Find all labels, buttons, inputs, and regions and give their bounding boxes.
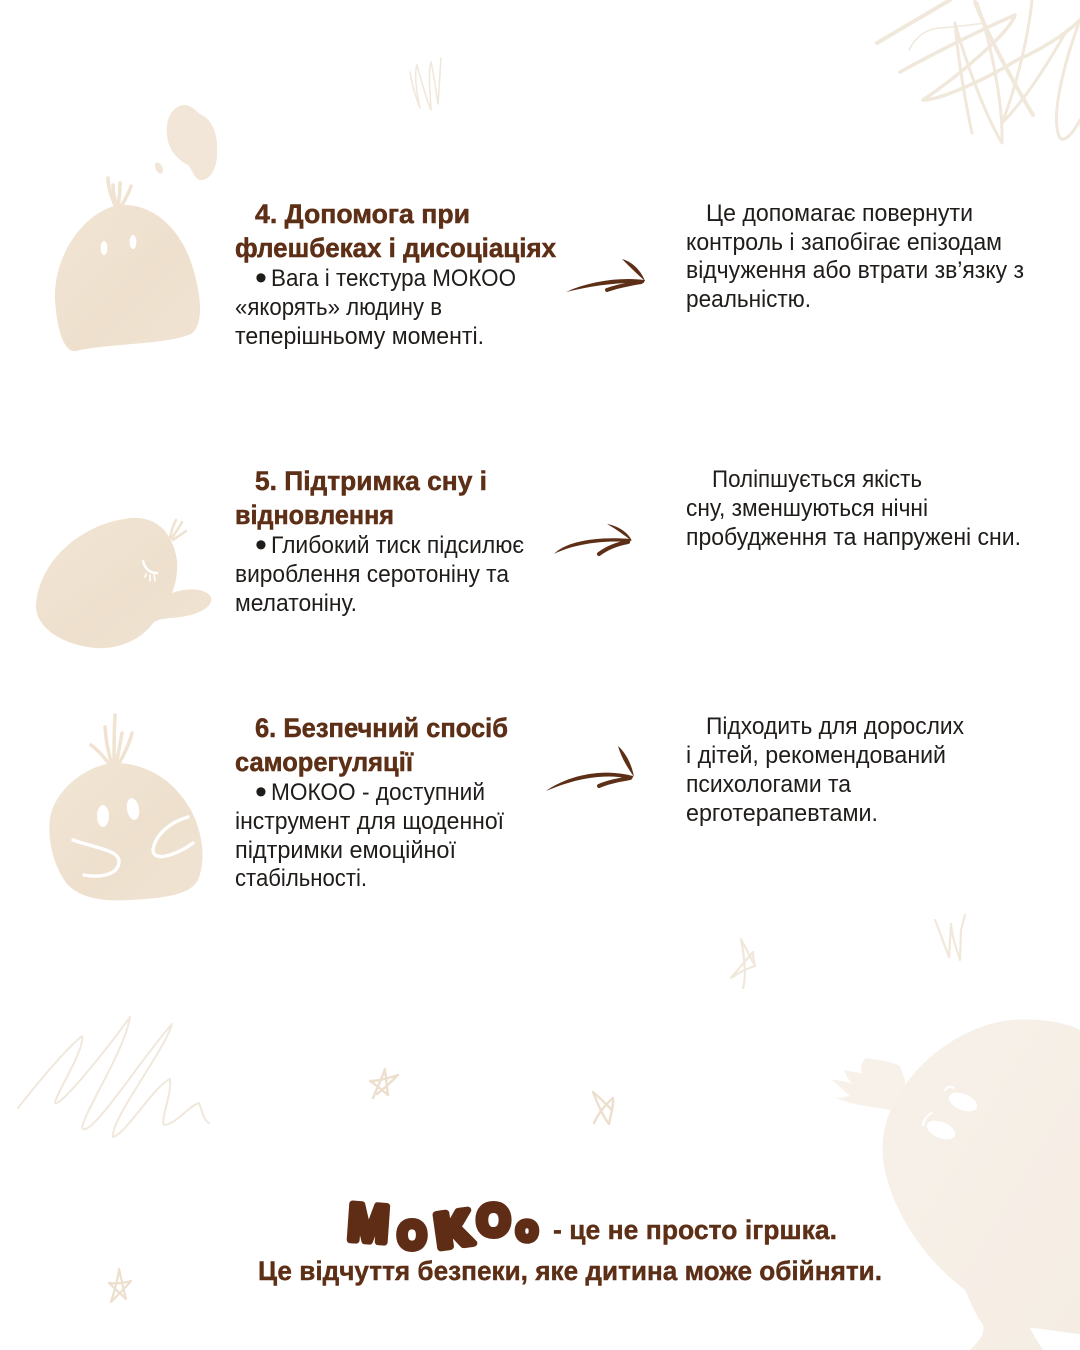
scribble: small W (935, 915, 965, 960)
text: block 4 description: теперішньому моменті. (235, 323, 484, 350)
text: block 4 result: контроль і запобігає епізодам (686, 229, 1002, 256)
scribble: star 3 (109, 1269, 131, 1302)
text: block 5 description: • (255, 526, 267, 564)
heading: block 5: 5. Підтримка сну і (255, 466, 487, 496)
text: block 5 description (235, 526, 524, 617)
arrow: block 6 (546, 746, 634, 791)
scribble: top right (877, 0, 1080, 143)
text: block 6 result (686, 713, 964, 827)
arrow: block 4 (566, 259, 645, 292)
text: block 5 result: Поліпшується якість (712, 466, 922, 493)
character: block 5 (36, 518, 211, 648)
text: block 5 description: мелатоніну. (235, 590, 357, 617)
heading: block 6: саморегуляції (235, 747, 414, 777)
text: block 4 result: Це допомагає повернути (706, 200, 973, 227)
footer: tagline (258, 1215, 882, 1286)
footer: tagline: - це не просто ігршка. (553, 1215, 837, 1245)
text: block 5 result (686, 466, 1021, 551)
text: block 6 description: стабільності. (235, 865, 367, 892)
text: block 4 result: відчуження або втрати зв’язку з (686, 257, 1024, 284)
logo: MOKOO (346, 1194, 537, 1259)
text: block 4 result (686, 200, 1024, 313)
text: block 6 result: психологами та (686, 771, 852, 798)
heading: block 5: відновлення (235, 500, 394, 530)
text: block 6 description: підтримки емоційної (235, 837, 456, 864)
character: block 4 (55, 178, 200, 351)
text: block 5 description: вироблення серотоніну та (235, 561, 510, 588)
text: block 5 result: пробудження та напружені сни. (686, 524, 1021, 551)
text: block 4 description (235, 259, 516, 350)
text: block 6 description: інструмент для щоденної (235, 808, 504, 835)
scribble: top center (410, 58, 441, 110)
logo: MOKOO: О (398, 1215, 426, 1257)
scribble: star 1 (370, 1069, 398, 1098)
scribble: zigzag bottom left (18, 1017, 209, 1137)
text: block 5 description: Глибокий тиск підсилює (271, 532, 524, 559)
arrow: block 5 (554, 524, 632, 554)
text: block 6 description: • (255, 773, 267, 811)
text: block 5 result: сну, зменшуються нічні (686, 495, 928, 522)
heading: block 4 (235, 199, 556, 263)
logo: MOKOO: К (432, 1201, 475, 1259)
text: block 6 result: Підходить для дорослих (706, 713, 964, 740)
scribble: star right of center (731, 939, 755, 988)
character: block 6 (49, 715, 203, 900)
text: block 4 result: реальністю. (686, 286, 811, 313)
text: block 6 result: і дітей, рекомендований (686, 742, 946, 769)
logo: MOKOO: О (517, 1216, 537, 1246)
heading: block 4: 4. Допомога при (255, 199, 470, 229)
text: block 6 description (235, 773, 504, 892)
heading: block 6: 6. Безпечний спосіб (255, 713, 508, 743)
thought bubble (153, 105, 217, 180)
text: block 4 description: «якорять» людину в (235, 294, 442, 321)
heading: block 4: флешбеках і дисоціаціях (235, 233, 556, 263)
text: block 6 description: МОКОО - доступний (271, 779, 485, 806)
heading: block 6 (235, 713, 508, 777)
heading: block 5 (235, 466, 487, 530)
text: block 6 result: ерготерапевтами. (686, 800, 878, 827)
character: large bottom right (832, 1019, 1080, 1350)
logo: MOKOO: О (477, 1196, 510, 1245)
logo: MOKOO: М (346, 1194, 391, 1254)
text: block 4 description: • (255, 259, 267, 297)
text: block 4 description: Вага і текстура МОКОО (271, 265, 516, 292)
footer: tagline: Це відчуття безпеки, яке дитина може обійняти. (258, 1256, 882, 1286)
scribble: star 2 (593, 1092, 613, 1124)
